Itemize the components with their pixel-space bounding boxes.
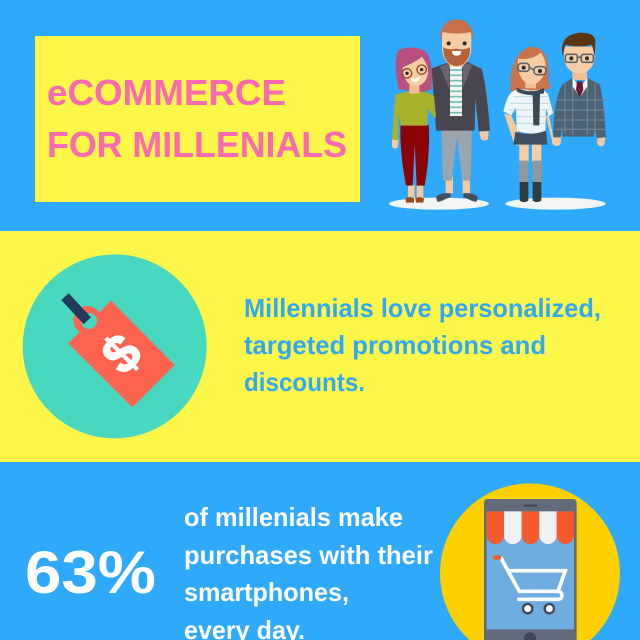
text block: smartphone purchases: purchases with their [184,540,433,570]
dollar sign: $ [90,323,153,386]
home button [524,632,536,640]
person: woman with scarf [503,47,561,202]
panel: header band [0,0,640,231]
tag string [65,297,87,321]
person: man in plaid sweater [552,33,606,146]
person: woman with pink hair [392,47,436,203]
title: eCOMMERCE [47,72,286,113]
text block: smartphone purchases: smartphones, [184,577,349,607]
text block: smartphone purchases [184,502,433,640]
icon: smartphone shop in circle [440,483,620,640]
yellow circle [440,483,620,640]
shopping cart [493,555,565,613]
icon: group of four millennials [389,19,606,210]
speaker [524,505,537,507]
text block: promotions: targeted promotions and [244,330,546,360]
panel: smartphone band [0,462,640,640]
teal circle [23,254,207,438]
text block: promotions: Millennials love personalized, [244,293,601,323]
ground shadows [389,198,606,210]
phone body [484,499,577,640]
title [47,72,347,165]
panel: title box [35,36,360,202]
statistic: 63%: 63% [25,539,156,606]
icon: price tag in circle [23,254,207,438]
text block: promotions: discounts. [244,367,365,397]
person: man with beard [432,19,490,202]
shop awning [487,511,574,544]
phone screen [487,511,574,629]
panel: promotions band [0,231,640,462]
text block: promotions [244,293,601,397]
text block: smartphone purchases: of millenials make [184,502,403,532]
tag body [68,301,175,407]
title: FOR MILLENIALS [47,124,347,165]
